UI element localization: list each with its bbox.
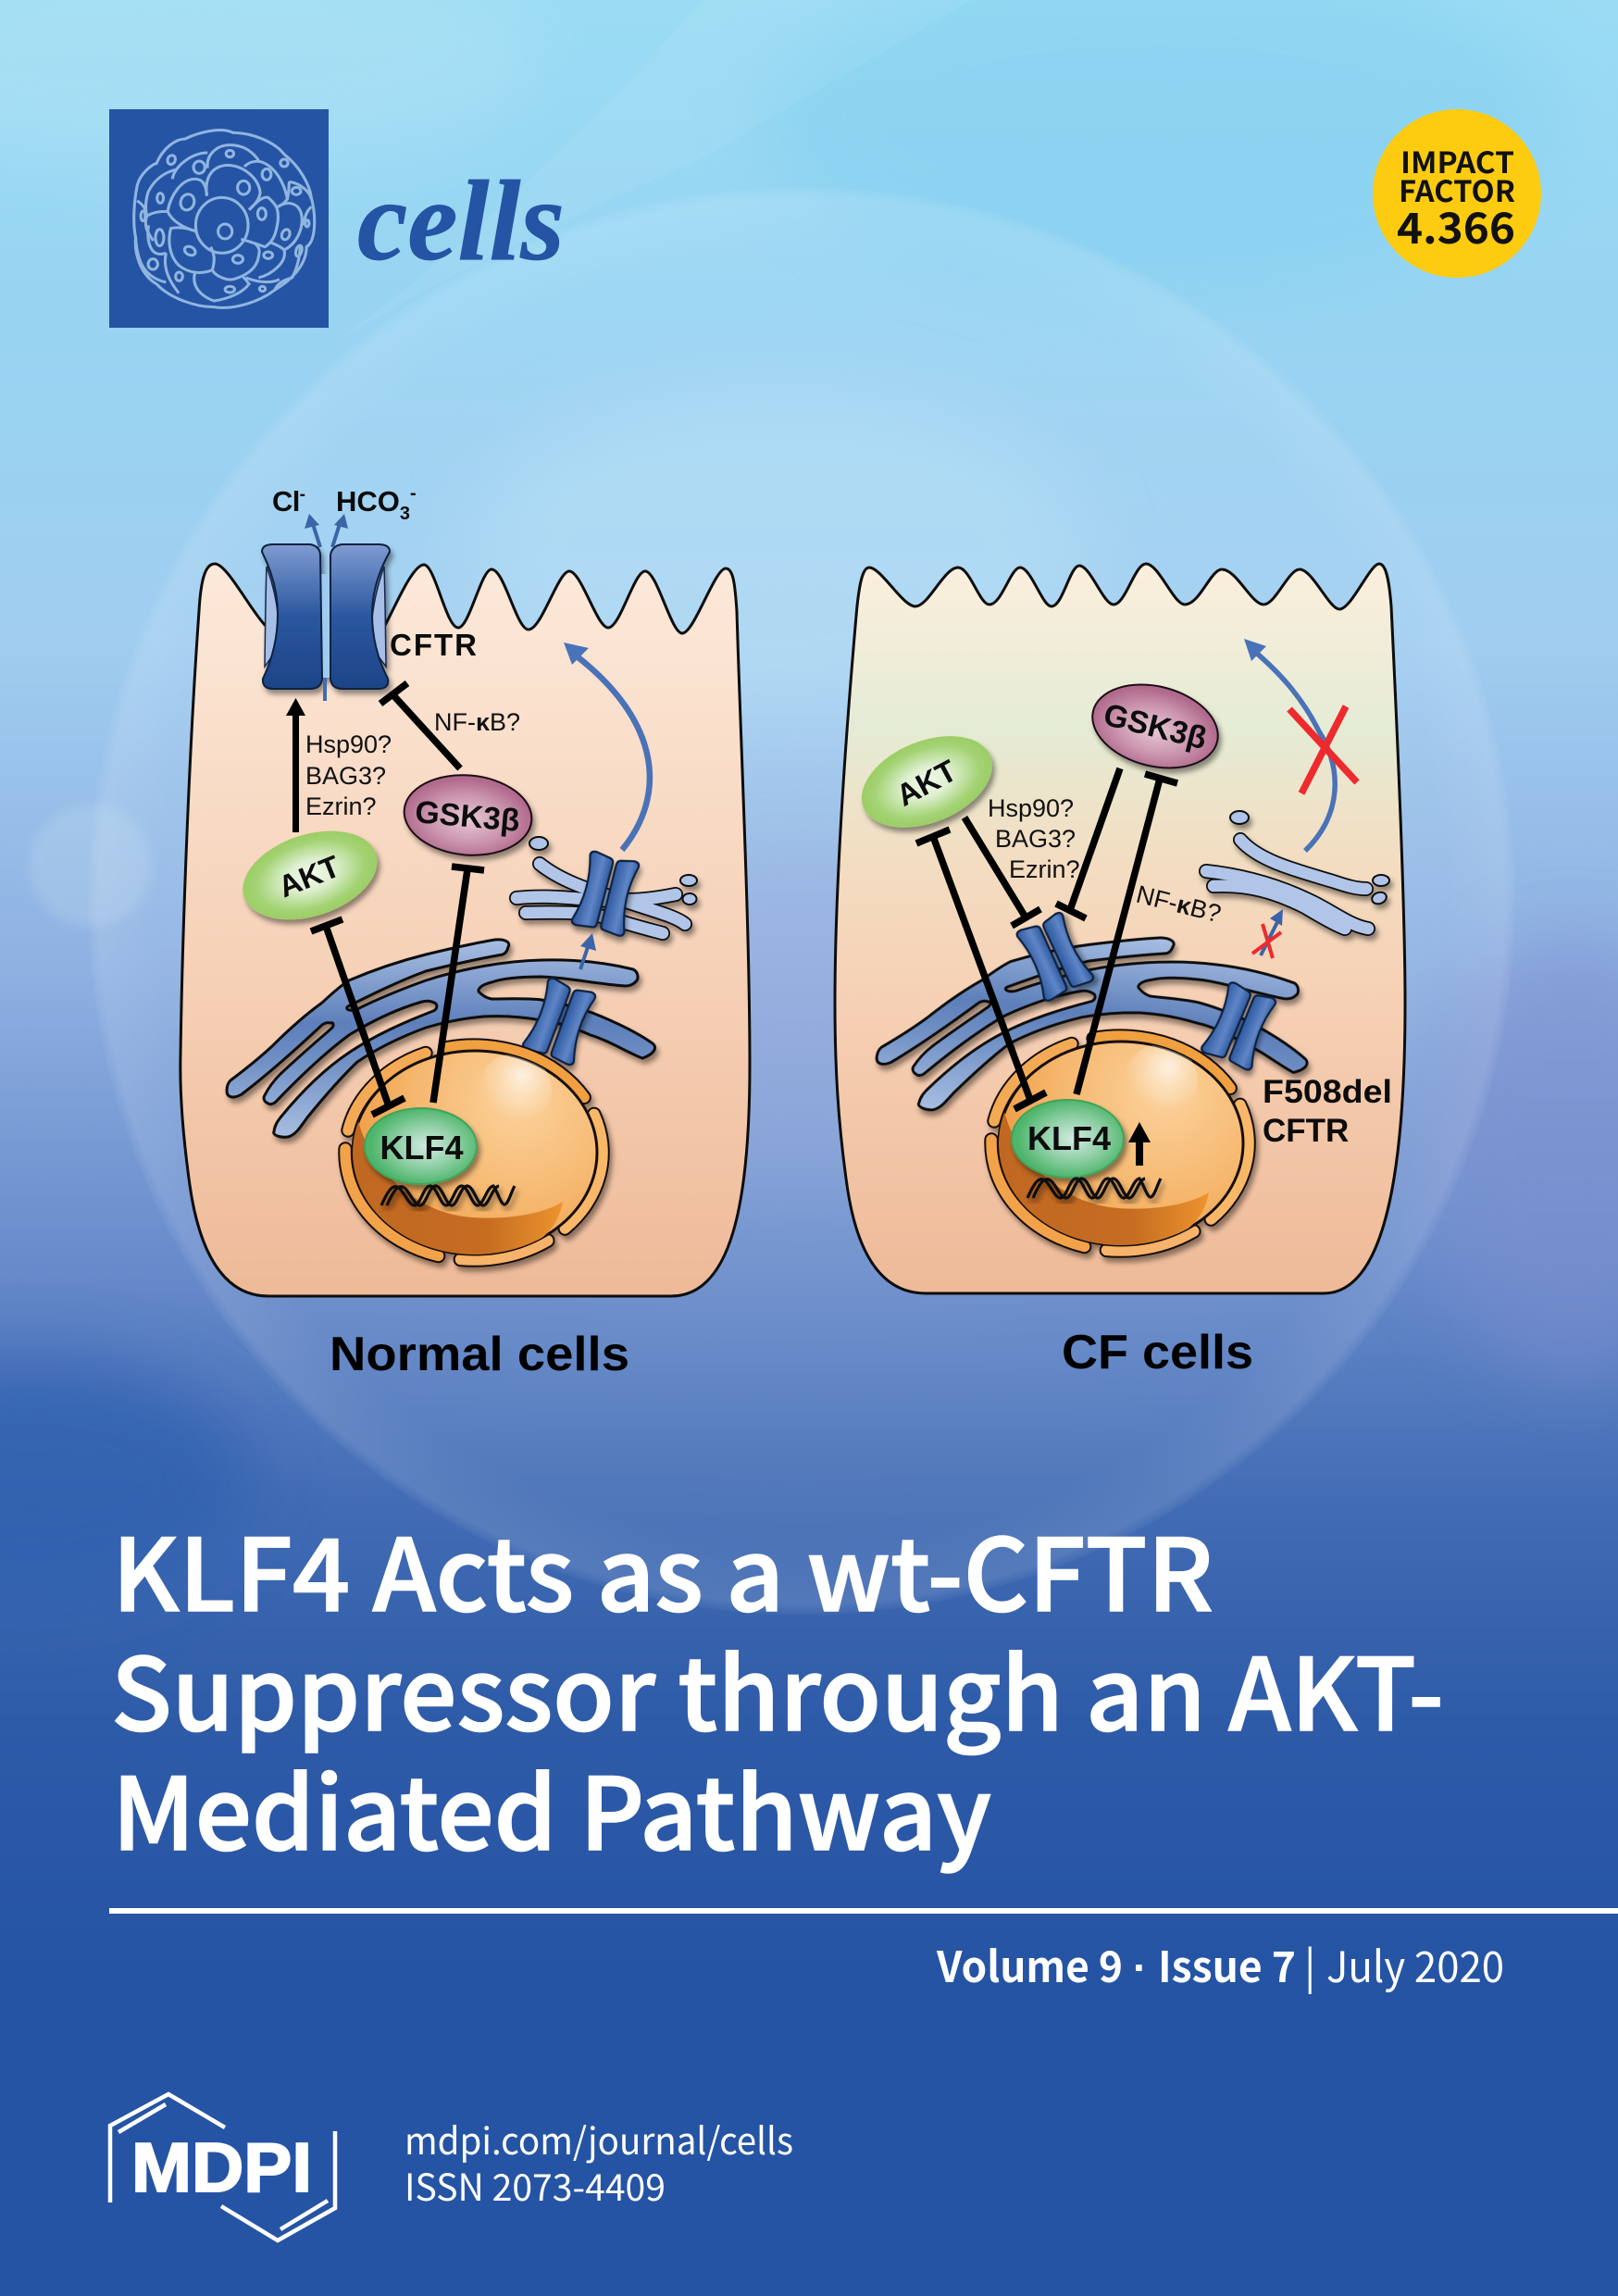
- modulators: Ezrin?: [305, 792, 377, 820]
- arrow: AKT to CFTR: [286, 698, 305, 832]
- issue line: July 2020: [1326, 1934, 1504, 1995]
- GSK3b: GSK3β: [414, 794, 521, 839]
- inhibition: AKT to ER CFTR: [965, 817, 1040, 926]
- mutation label: CFTR: [1263, 1113, 1349, 1149]
- ER: [227, 940, 654, 1137]
- impact factor badge: 4.366: [1397, 195, 1515, 256]
- GSK3b: GSK3β: [1100, 697, 1211, 756]
- modulators: Hsp90?: [988, 794, 1074, 822]
- modulators: Ezrin?: [1009, 855, 1080, 883]
- GSK3b: [401, 770, 535, 860]
- ER CFTR trapped: [1014, 911, 1095, 1002]
- inhibition: KLF4 to GSK3b: [1077, 774, 1177, 1094]
- mutation label: F508del: [1263, 1074, 1392, 1110]
- title rule: [109, 1908, 1618, 1914]
- inhibition: KLF4 to AKT: [916, 830, 1046, 1109]
- impact factor badge: FACTOR: [1399, 168, 1515, 211]
- ER: [871, 906, 1319, 1153]
- DNA: [1027, 1179, 1161, 1198]
- ion labels: [272, 483, 417, 524]
- caption: normal cells: Normal cells: [330, 1328, 629, 1381]
- ion labels: HCO: [336, 485, 400, 518]
- cell body: [180, 564, 750, 1296]
- small arrow: ER to golgi: [580, 933, 596, 969]
- CFTR label: CFTR: [390, 628, 477, 662]
- article title: [111, 1496, 1444, 1879]
- article title: Mediated Pathway: [112, 1735, 991, 1879]
- curved arrow: blocked trafficking: [1244, 639, 1335, 851]
- ER CFTR: [1201, 980, 1278, 1071]
- nucleus: [345, 1045, 603, 1260]
- mutation label: [1263, 1074, 1392, 1149]
- GSK3b: [1084, 672, 1226, 780]
- article title: KLF4 Acts as a wt-CFTR: [112, 1496, 1214, 1641]
- journal logo: [109, 109, 329, 328]
- issue line: ·: [1133, 1943, 1147, 1991]
- journal link and ISSN: [404, 2112, 793, 2212]
- caption: CF cells: CF cells: [1062, 1326, 1253, 1379]
- modulators: [305, 730, 392, 820]
- KLF4: KLF4: [1027, 1119, 1111, 1157]
- inhibition: KLF4 to AKT: [311, 919, 404, 1115]
- small arrow blocked: [1252, 909, 1283, 958]
- DNA: [381, 1186, 515, 1205]
- issue line: Issue 7: [1158, 1934, 1296, 1995]
- inhibition: KLF4 to GSK3b: [433, 867, 484, 1103]
- issue line: Volume 9: [936, 1934, 1123, 1995]
- ion labels: -: [300, 485, 305, 505]
- ion labels: Cl: [272, 485, 300, 518]
- curved arrow: trafficking: [564, 643, 650, 850]
- modulators: BAG3?: [305, 762, 386, 790]
- CFTR channel at membrane: [262, 544, 390, 689]
- AKT: AKT: [890, 753, 962, 813]
- journal name: cells: [357, 157, 565, 284]
- journal link and ISSN: ISSN 2073-4409: [404, 2158, 666, 2212]
- ion labels: -: [410, 483, 417, 504]
- golgi: [1206, 811, 1389, 929]
- modulators: Hsp90?: [305, 730, 392, 758]
- panel: CF cell: [835, 564, 1405, 1293]
- golgi CFTR: [571, 850, 641, 937]
- ER CFTR: [522, 977, 598, 1066]
- nucleus: [991, 1036, 1249, 1251]
- modulators: [988, 794, 1080, 883]
- impact factor badge: IMPACT: [1400, 140, 1514, 182]
- ion arrows: [305, 514, 348, 547]
- up arrow: KLF4 increased: [1128, 1122, 1151, 1166]
- impact factor badge: [1373, 109, 1541, 278]
- inhibition: GSK3b to ER CFTR: [1056, 768, 1120, 918]
- AKT: [848, 718, 1006, 845]
- KLF4: KLF4: [380, 1129, 463, 1167]
- AKT: AKT: [273, 849, 344, 904]
- panel: normal cell: [180, 483, 750, 1296]
- KLF4: [365, 1108, 477, 1184]
- MDPI logo: [110, 2094, 335, 2240]
- modulators: BAG3?: [995, 825, 1076, 853]
- KLF4: [1012, 1100, 1124, 1178]
- journal link and ISSN: mdpi.com/journal/cells: [404, 2112, 793, 2165]
- golgi: [517, 837, 697, 933]
- article title: Suppressor through an AKT-: [111, 1616, 1444, 1760]
- cell body: [835, 564, 1405, 1293]
- issue line: [936, 1934, 1504, 1995]
- red cross: blocked trafficking: [1289, 706, 1357, 793]
- MDPI logo: MDPI: [131, 2128, 312, 2206]
- AKT: [231, 815, 389, 936]
- NF-kB label: NF-κB?: [1134, 880, 1224, 928]
- issue line: |: [1304, 1934, 1315, 1995]
- NF-kB label: NF-κB?: [434, 708, 520, 736]
- ion labels: 3: [400, 504, 410, 524]
- inhibition: GSK3b to CFTR: [380, 683, 460, 768]
